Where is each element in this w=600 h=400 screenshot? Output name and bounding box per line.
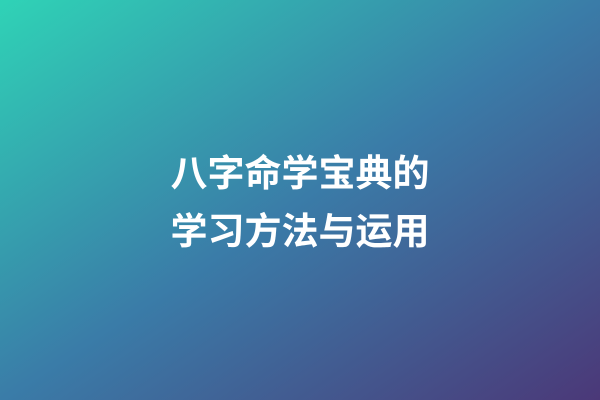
title [170,153,430,252]
title line 2: 学习方法与运用 [170,211,430,252]
title line 1: 八字命学宝典的 [170,153,430,194]
